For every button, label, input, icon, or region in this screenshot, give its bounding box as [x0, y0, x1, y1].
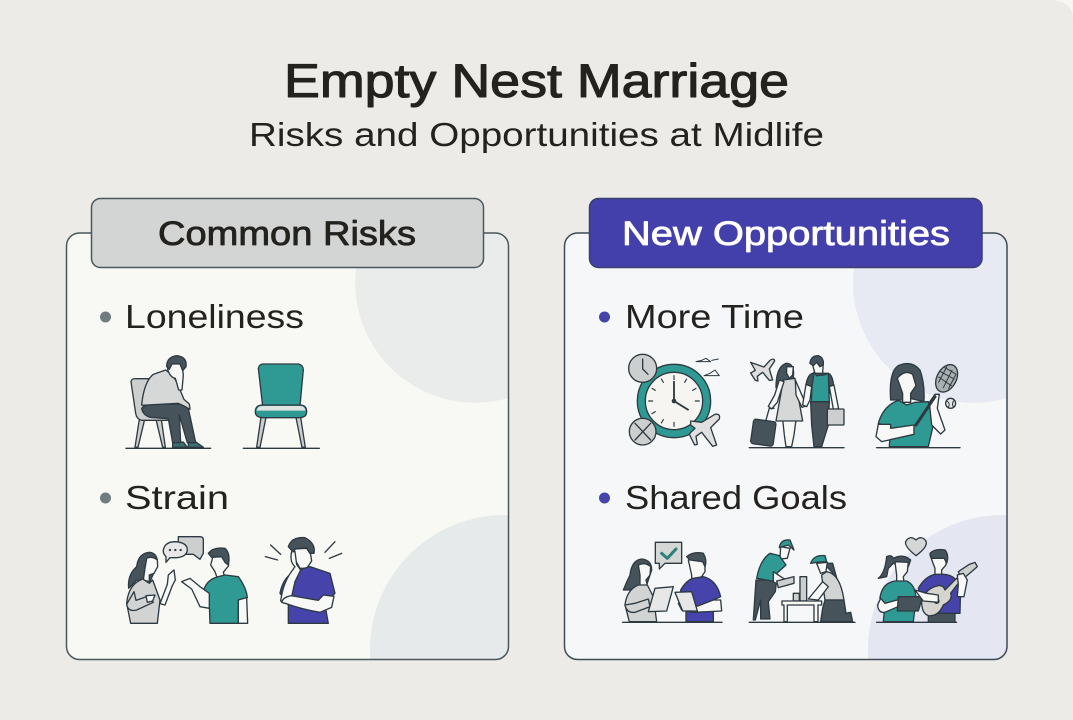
icon: couple travelling with luggage: [749, 356, 844, 448]
item: strain: [100, 479, 229, 516]
icon: couple with guitar and heart: [877, 538, 977, 622]
heading: new opportunities: New Opportunities: [622, 215, 950, 253]
item: shared goals: Shared Goals: [625, 479, 847, 516]
icon: woman with tennis racket: [876, 361, 962, 448]
heading: common risks: Common Risks: [158, 215, 416, 253]
heading: common risks: [92, 198, 484, 268]
item: more time: More Time: [625, 298, 804, 335]
icon: couple planning with tablets: [623, 542, 722, 622]
item: strain: Strain: [125, 479, 229, 516]
panel: common risks: [66, 198, 508, 660]
panel: new opportunities: [564, 198, 1007, 660]
title: Empty Nest Marriage: [284, 54, 789, 107]
subtitle: Risks and Opportunities at Midlife: [249, 116, 824, 153]
icon: stressed man holding head: [265, 538, 342, 623]
icon: empty teal chair: [243, 364, 319, 448]
heading: new opportunities: [590, 198, 982, 268]
item: loneliness: Loneliness: [125, 298, 304, 335]
icon: couple building together: [749, 540, 855, 622]
icon: man sitting alone on chair: [126, 356, 211, 448]
icon: couple arguing with speech bubbles: [127, 537, 248, 623]
icon: clock with plane and cutlery: [629, 354, 720, 446]
